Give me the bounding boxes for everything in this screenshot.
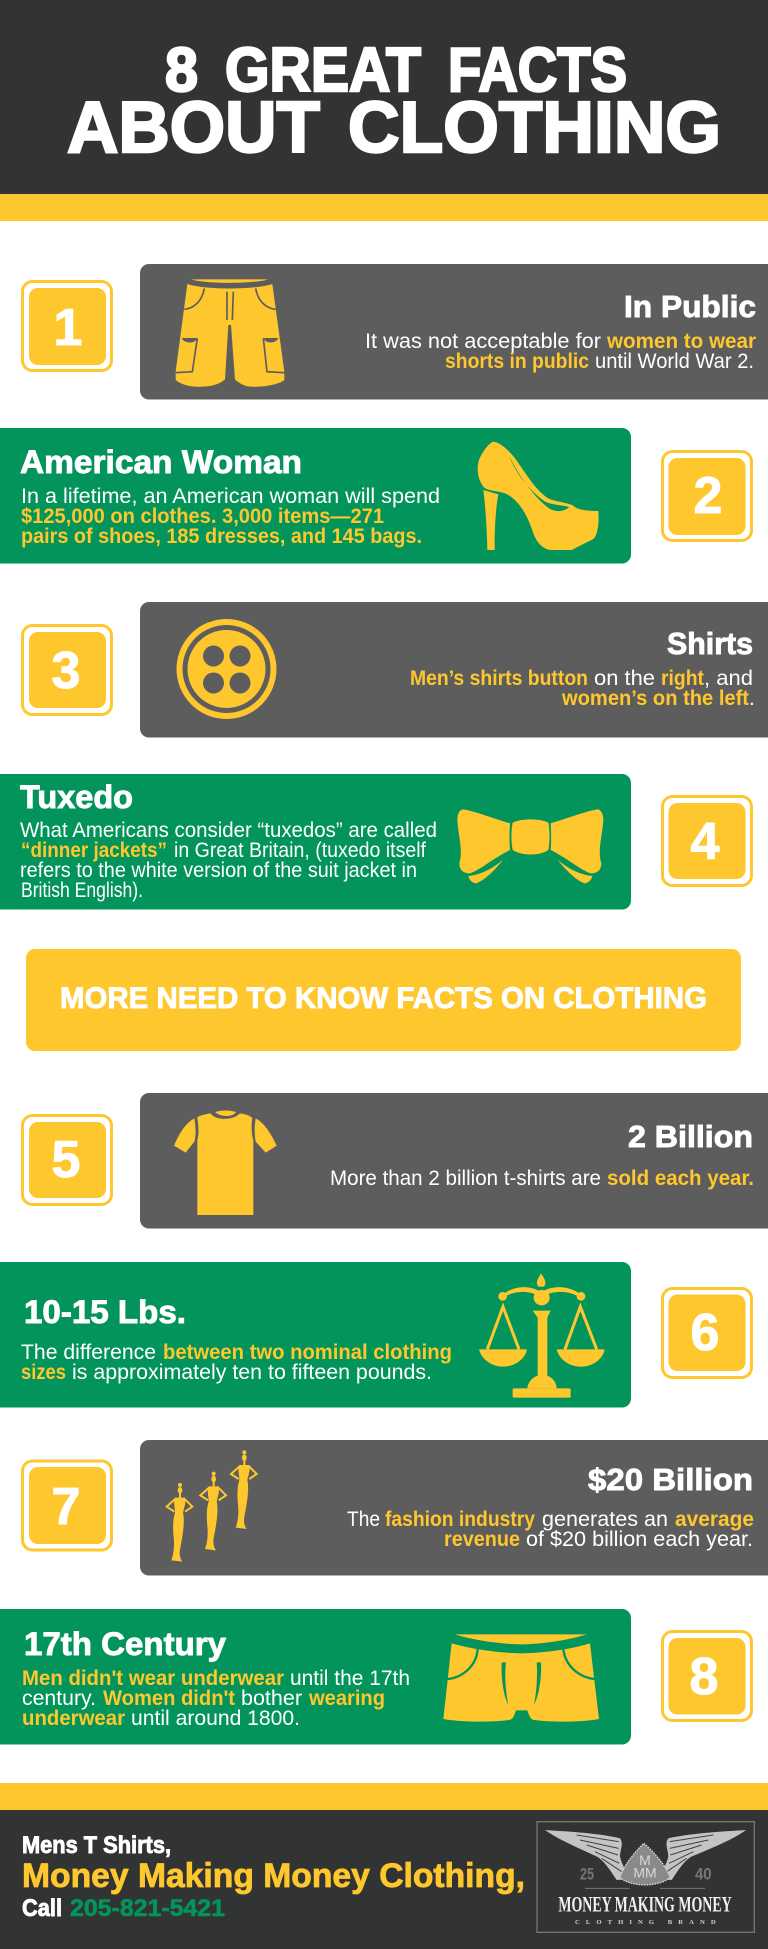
body text: average	[675, 1508, 754, 1531]
footer text: Call	[22, 1895, 62, 1922]
number badge 4: 4	[691, 813, 720, 871]
body text: women to wear	[606, 330, 756, 353]
icon: fashion models	[167, 1450, 257, 1562]
body text: century.	[22, 1687, 96, 1710]
icon: cargo shorts	[176, 279, 284, 387]
body text: sizes	[21, 1361, 66, 1384]
body text	[365, 330, 756, 373]
body text: What Americans consider “tuxedos” are called	[20, 819, 437, 842]
body text: The	[347, 1508, 380, 1531]
number badge 6	[662, 1288, 752, 1378]
number badge 8: 8	[690, 1648, 718, 1706]
body text: until around 1800.	[131, 1707, 300, 1730]
heading: $20 Billion	[588, 1462, 753, 1497]
body text: generates an	[542, 1508, 668, 1531]
body text: pairs of shoes, 185 dresses, and 145 bags.	[21, 525, 422, 548]
body text: on the	[594, 667, 655, 690]
body text: Men’s shirts button	[410, 667, 588, 690]
body text: Men didn't wear underwear	[22, 1667, 284, 1690]
body text	[20, 819, 437, 902]
banner: more facts	[26, 949, 741, 1051]
number badge 1: 1	[54, 299, 82, 357]
title: FACTS	[448, 36, 627, 105]
panel: 20 billion	[140, 1440, 768, 1576]
heading: 2 Billion	[628, 1119, 753, 1154]
body text	[330, 1167, 754, 1190]
number badge 8	[662, 1632, 752, 1720]
logo numbers	[580, 1864, 712, 1883]
icon: button	[176, 619, 276, 719]
icon: high heel	[478, 442, 599, 550]
logo numbers: 25	[580, 1864, 594, 1883]
number badge 7: 7	[52, 1478, 80, 1536]
title: CLOTHING	[348, 88, 721, 168]
title: 8	[165, 36, 198, 105]
panel: tuxedo	[0, 774, 631, 910]
logo shield	[620, 1843, 670, 1885]
logo shield: MM	[633, 1864, 657, 1880]
body text	[410, 667, 755, 710]
number badge 5	[22, 1116, 112, 1204]
footer band	[0, 1783, 768, 1949]
body text	[347, 1508, 754, 1551]
body text: It was not acceptable for	[365, 330, 601, 353]
body text: .	[749, 687, 755, 710]
number badge 2: 2	[694, 467, 722, 525]
body text: More than 2 billion t-shirts are	[330, 1167, 601, 1190]
banner: more facts: MORE NEED TO KNOW FACTS ON CLOTHING	[60, 982, 707, 1015]
footer text: Mens T Shirts,	[22, 1832, 171, 1859]
body text: fashion industry	[385, 1508, 535, 1531]
icon: scales	[479, 1273, 605, 1398]
footer text: Money Making Money Clothing,	[22, 1857, 525, 1895]
logo wings	[545, 1830, 746, 1888]
body text: is approximately ten to fifteen pounds.	[72, 1361, 432, 1384]
panel: american woman	[0, 428, 631, 564]
heading: American Woman	[20, 444, 302, 480]
body text	[21, 1341, 452, 1384]
body text	[21, 485, 440, 548]
number badge 4	[662, 796, 752, 886]
panel: 2 billion	[140, 1093, 768, 1228]
body text: bother	[241, 1687, 302, 1710]
heading: 10-15 Lbs.	[24, 1294, 186, 1330]
heading: In Public	[624, 289, 756, 324]
body text: until World War 2.	[595, 350, 754, 373]
body text: revenue	[444, 1528, 520, 1551]
logo: money making money	[537, 1822, 754, 1932]
title	[67, 36, 721, 168]
title: ABOUT	[67, 88, 320, 168]
panel: shirts	[140, 602, 768, 738]
header band	[0, 0, 768, 221]
body text: $125,000 on clothes. 3,000 items—271	[21, 505, 384, 528]
heading: Shirts	[667, 626, 753, 661]
number badge 3	[22, 626, 112, 714]
number badge 1	[22, 282, 112, 370]
body text: right	[661, 667, 704, 690]
footer text: 205-821-5421	[70, 1895, 225, 1922]
logo tagline: CLOTHING BRAND	[575, 1919, 716, 1926]
body text: refers to the white version of the suit jacket in	[20, 859, 417, 882]
body text: between two nominal clothing	[163, 1341, 452, 1364]
number badge 5: 5	[52, 1131, 80, 1189]
panel: in public	[140, 264, 768, 400]
body text: British English).	[21, 879, 143, 902]
body text: “dinner jackets”	[21, 839, 167, 862]
body text: Women didn't	[103, 1687, 235, 1710]
body text: shorts in public	[445, 350, 589, 373]
body text: The difference	[21, 1341, 156, 1364]
body text	[22, 1667, 410, 1730]
heading: Tuxedo	[20, 779, 133, 815]
panel: 17th century	[0, 1609, 631, 1744]
icon: bow tie	[457, 809, 603, 883]
body text: wearing	[308, 1687, 385, 1710]
logo numbers: 40	[695, 1864, 712, 1883]
number badge 7	[22, 1461, 112, 1550]
heading: 17th Century	[24, 1626, 226, 1662]
body text: underwear	[22, 1707, 125, 1730]
number badge 3: 3	[52, 642, 80, 700]
body text: sold each year.	[607, 1167, 754, 1190]
body text: in Great Britain, (tuxedo itself	[174, 839, 426, 862]
body text: of $20 billion each year.	[526, 1528, 753, 1551]
number badge 2	[662, 452, 752, 540]
footer text	[22, 1832, 525, 1922]
body text: women’s on the left	[561, 687, 749, 710]
title: GREAT	[225, 36, 421, 105]
number badge 6: 6	[691, 1304, 719, 1362]
icon: t-shirt	[174, 1110, 277, 1215]
body text: , and	[704, 667, 753, 690]
logo shield: M	[639, 1852, 651, 1868]
icon: underwear	[443, 1634, 599, 1722]
body text: until the 17th	[290, 1667, 410, 1690]
panel: 10-15 lbs	[0, 1262, 631, 1408]
body text: In a lifetime, an American woman will spend	[21, 485, 440, 508]
